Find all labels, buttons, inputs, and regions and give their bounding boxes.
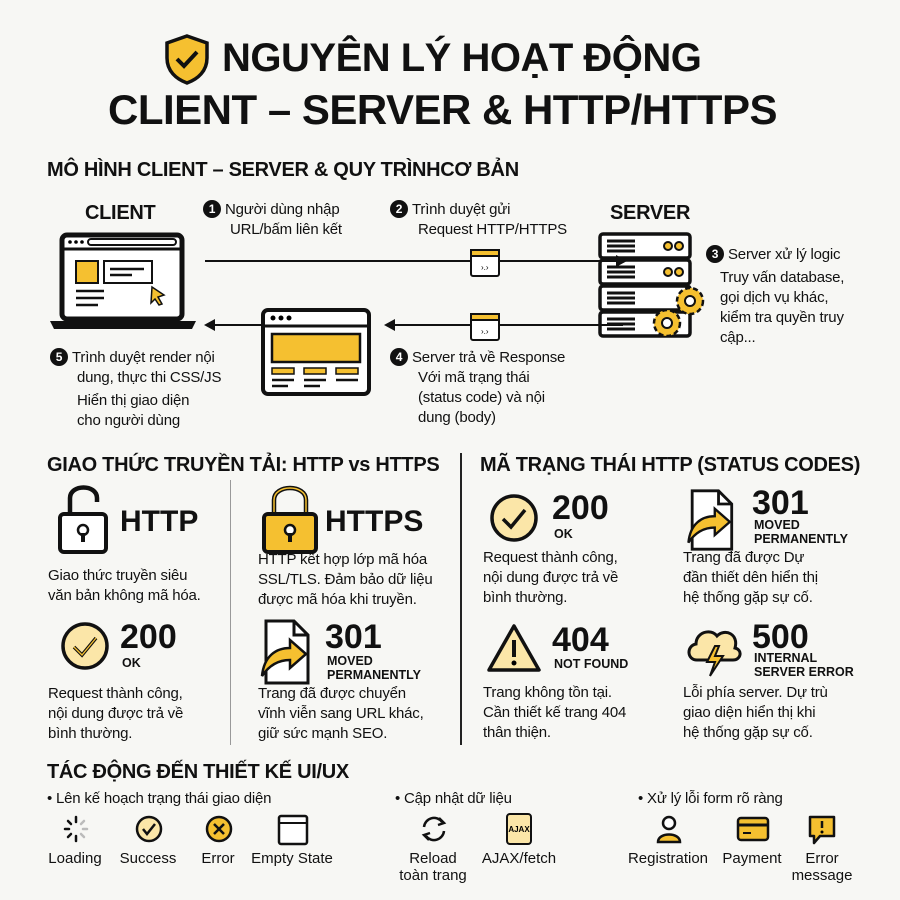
- icon: shield: [165, 34, 209, 85]
- icon: empty state: Empty State: [251, 850, 333, 867]
- bullets: • Lên kế hoạch trạng thái giao diện: [47, 790, 271, 807]
- desc: [48, 685, 183, 742]
- step 2: Trình duyệt gửi: [412, 201, 510, 218]
- panel: client-server flow: gọi dịch vụ khác,: [720, 289, 828, 306]
- panel: 500: SERVER ERROR: [754, 665, 854, 679]
- panel: http: HTTP: [120, 505, 198, 538]
- icon: reload: Reload: [409, 850, 457, 867]
- desc: [683, 684, 828, 741]
- step 4: [390, 348, 565, 426]
- arrow: request: [205, 255, 626, 266]
- step 4: 4: [396, 350, 402, 364]
- icon: ajax: [474, 812, 564, 872]
- desc: [258, 685, 424, 742]
- panel: client-server flow: [50, 200, 844, 429]
- panel: 200 left: [48, 618, 183, 742]
- step 5: Trình duyệt render nội: [72, 349, 215, 366]
- desc: văn bản không mã hóa.: [48, 587, 201, 604]
- title: [108, 34, 777, 133]
- step 4: Server trả về Response: [412, 349, 565, 366]
- desc: Request thành công,: [48, 685, 183, 702]
- step 2: 2: [396, 202, 402, 216]
- heading: ui/ux: TÁC ĐỘNG ĐẾN THIẾT KẾ UI/UX: [47, 761, 349, 783]
- step 5: dung, thực thi CSS/JS: [77, 369, 221, 386]
- icon: reload: [388, 812, 478, 872]
- panel: 301 left: PERMANENTLY: [327, 668, 421, 682]
- desc: thân thiện.: [483, 724, 551, 741]
- panel: 301 left: 301: [325, 618, 382, 656]
- panel: 200 right: OK: [554, 527, 573, 541]
- step 4: dung (body): [418, 409, 496, 426]
- panel: client-server flow: Hiển thị giao diện: [77, 392, 189, 409]
- step 1: URL/bấm liên kết: [230, 221, 342, 238]
- server label: SERVER: [610, 202, 690, 224]
- desc: vĩnh viễn sang URL khác,: [258, 705, 424, 722]
- step 4: (status code) và nội: [418, 389, 545, 406]
- icon: request packet: [470, 249, 500, 277]
- icon: success: Success: [120, 850, 176, 867]
- icon: payment: Payment: [722, 850, 782, 867]
- icon: error message: [777, 812, 867, 872]
- arrow: response: [384, 319, 623, 331]
- icon: ajax: AJAX: [508, 825, 530, 834]
- icon: check circle: [490, 494, 538, 542]
- step 1: 1: [209, 202, 215, 216]
- panel: 404: 404: [552, 621, 609, 659]
- desc: [483, 549, 618, 606]
- title: NGUYÊN LÝ HOẠT ĐỘNG: [222, 36, 701, 80]
- panel: 200 right: 200: [552, 489, 609, 527]
- icon: registration: [623, 812, 713, 872]
- panel: https: [258, 486, 432, 608]
- desc: hệ thống gặp sự cố.: [683, 589, 813, 606]
- desc: Request thành công,: [483, 549, 618, 566]
- icon: cloud bolt: [687, 630, 742, 676]
- icon: response packet: ›.›: [481, 327, 489, 336]
- desc: [258, 551, 432, 608]
- title: CLIENT – SERVER & HTTP/HTTPS: [108, 86, 777, 133]
- desc: HTTP kết hợp lớp mã hóa: [258, 551, 427, 568]
- desc: [683, 549, 818, 606]
- icon: loading: Loading: [48, 850, 102, 867]
- arrow: to client: [204, 319, 261, 331]
- step 5: [50, 348, 221, 386]
- ui icons row: [30, 812, 880, 887]
- ui icons row: toàn trang: [399, 867, 467, 884]
- desc: [48, 567, 201, 604]
- desc: Giao thức truyền siêu: [48, 567, 187, 584]
- desc: Trang đã được Dự: [683, 549, 804, 566]
- desc: bình thường.: [48, 725, 132, 742]
- desc: được mã hóa khi truyền.: [258, 591, 417, 608]
- desc: Trang không tồn tại.: [483, 684, 612, 701]
- icon: laptop: [50, 232, 196, 329]
- panel: 404: NOT FOUND: [554, 657, 628, 671]
- heading: model: MÔ HÌNH CLIENT – SERVER & QUY TRÌNHCƠ BẢN: [47, 159, 519, 181]
- step 4: Với mã trạng thái: [418, 369, 530, 386]
- ui icons row: message: [792, 867, 852, 884]
- icon: payment: [707, 812, 797, 872]
- icon: request packet: ›.›: [481, 263, 489, 272]
- icon: success: [103, 812, 193, 872]
- text: • Xử lý lỗi form rõ ràng: [638, 790, 783, 807]
- step 1: Người dùng nhập: [225, 201, 339, 218]
- panel: 301 right: [683, 484, 848, 606]
- icon: error: [173, 812, 263, 872]
- panel: 200 right: [483, 489, 618, 606]
- icon: open lock: [58, 485, 108, 554]
- desc: bình thường.: [483, 589, 567, 606]
- icon: check circle: [61, 622, 109, 670]
- icon: redirect doc: [687, 489, 734, 551]
- icon: error message: Error: [805, 850, 839, 867]
- panel: 200 left: OK: [122, 656, 141, 670]
- panel: client-server flow: Truy vấn database,: [720, 269, 844, 286]
- desc: đần thiết dên hiển thị: [683, 569, 818, 586]
- desc: Lỗi phía server. Dự trù: [683, 684, 828, 701]
- desc: Trang đã được chuyển: [258, 685, 406, 702]
- panel: client-server flow: kiểm tra quyền truy: [720, 309, 844, 326]
- desc: giao diện hiển thị khi: [683, 704, 815, 721]
- icon: redirect doc: [260, 620, 310, 684]
- icon: browser window: [261, 308, 371, 396]
- desc: SSL/TLS. Đảm bảo dữ liệu: [258, 571, 432, 588]
- panel: client-server flow: cập...: [720, 329, 756, 346]
- panel: 301 right: 301: [752, 484, 809, 522]
- panel: 404: [483, 621, 628, 741]
- panel: 301 left: MOVED: [327, 654, 373, 668]
- panel: 301 right: PERMANENTLY: [754, 532, 848, 546]
- panel: client-server flow: cho người dùng: [77, 412, 180, 429]
- step 3: Server xử lý logic: [728, 246, 840, 263]
- icon: loading: [30, 812, 120, 872]
- step 3: 3: [712, 247, 718, 261]
- desc: hệ thống gặp sự cố.: [683, 724, 813, 741]
- step 2: Request HTTP/HTTPS: [418, 221, 567, 238]
- desc: nội dung được trả về: [483, 569, 618, 586]
- desc: nội dung được trả về: [48, 705, 183, 722]
- icon: empty state: [247, 812, 337, 872]
- text: • Cập nhật dữ liệu: [395, 790, 512, 807]
- desc: [483, 684, 626, 741]
- desc: Cần thiết kế trang 404: [483, 704, 626, 721]
- icon: error: Error: [201, 850, 235, 867]
- step 5: 5: [56, 350, 62, 364]
- icon: registration: Registration: [628, 850, 708, 867]
- panel: 500: [683, 618, 854, 741]
- panel: 301 left: [258, 618, 424, 742]
- panel: http: [48, 485, 201, 604]
- heading: status codes: MÃ TRẠNG THÁI HTTP (STATUS CODES): [480, 454, 860, 476]
- step 2: [390, 200, 567, 238]
- icon: response packet: [470, 313, 500, 341]
- step 1: [203, 200, 342, 238]
- panel: 500: INTERNAL: [754, 651, 817, 665]
- icon: locked lock: [262, 486, 318, 554]
- icon: ajax: AJAX/fetch: [482, 850, 556, 867]
- icon: warning: [487, 624, 541, 672]
- panel: 301 right: MOVED: [754, 518, 800, 532]
- panel: https: HTTPS: [325, 505, 423, 538]
- icon: server: [598, 232, 704, 338]
- panel: 500: 500: [752, 618, 809, 656]
- panel: 200 left: 200: [120, 618, 177, 656]
- heading: http vs https: GIAO THỨC TRUYỀN TẢI: HTTP vs HTTPS: [47, 454, 439, 476]
- desc: giữ sức mạnh SEO.: [258, 725, 387, 742]
- client label: CLIENT: [85, 202, 155, 224]
